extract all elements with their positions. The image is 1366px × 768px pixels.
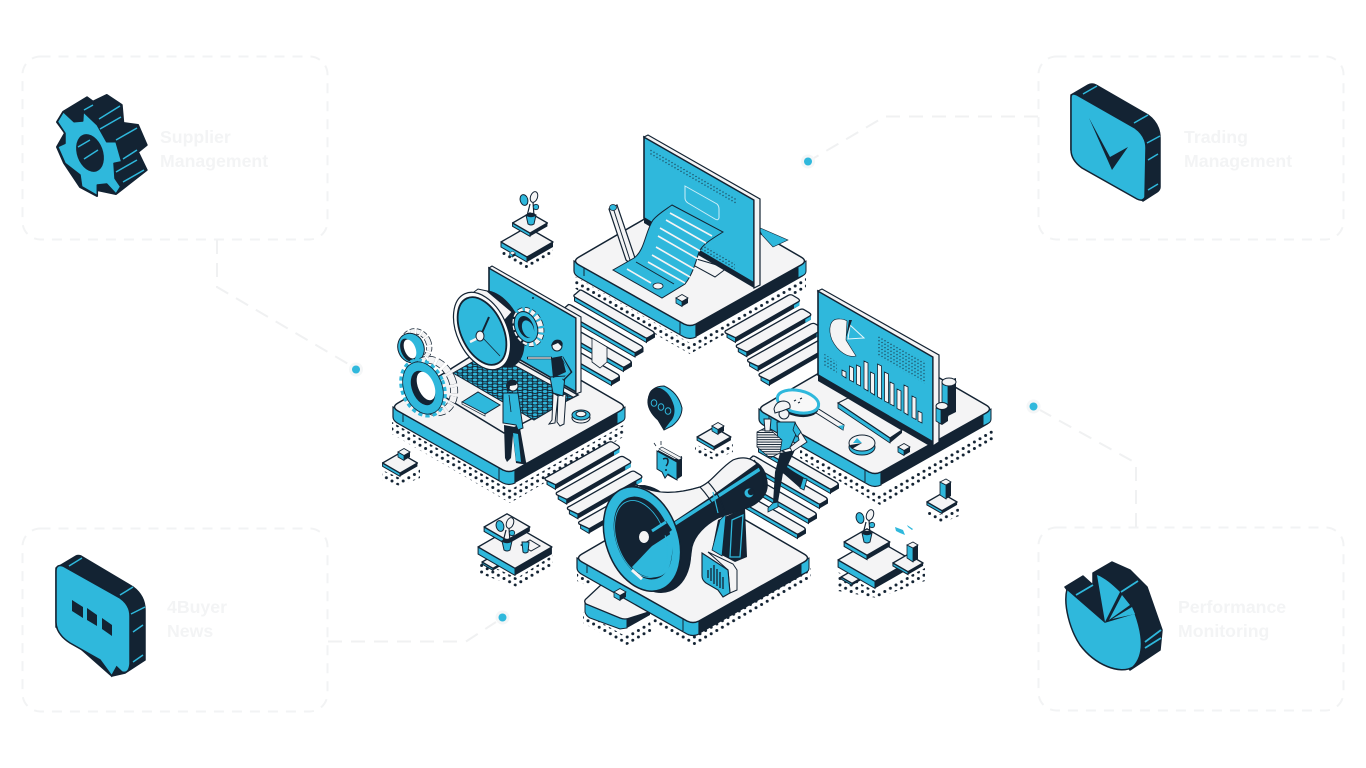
panel: trading management [1038,56,1344,240]
stair bars: bottom left [545,442,653,533]
connector: trading [801,116,1038,168]
panel: supplier management [22,56,328,240]
woman presenter [527,340,571,426]
panel: megaphone platform [577,458,809,636]
clock [442,281,536,379]
shield badge [592,338,607,368]
back sheet [758,227,788,247]
small cube [898,444,910,456]
stair bars: top left [539,290,655,386]
stair bars: bottom right [725,441,839,538]
megaphone rim back [597,475,705,603]
pencil [609,204,635,265]
label: Trading Management: Trading [1184,127,1248,147]
monitor stand [693,258,727,277]
prop: lower-right stack [838,509,923,588]
prop: device block right [927,479,957,514]
small cube [676,294,688,306]
label: 4Buyer News: 4Buyer [167,597,227,617]
connector: news [328,610,510,642]
magnifying glass [775,386,844,430]
panel: chart platform [759,289,991,486]
blue dashes [895,525,913,535]
prop: small block centre [697,422,731,450]
prop: lower-left stack [478,514,552,575]
stair bars: top right [725,295,834,385]
label: Trading Management: Management [1184,151,1292,171]
prop: small block left [383,448,417,476]
pie token [849,435,875,455]
panel: performance monitoring [1038,528,1344,710]
dots on screen [877,335,925,384]
horn body [637,458,767,590]
prop: plant block top [501,191,553,262]
panel: laptop platform [393,266,625,484]
keyboard [453,352,573,420]
dotted floor shadows [382,246,995,646]
bar chart [842,361,922,423]
cylinders [936,378,956,425]
monitor [644,135,760,288]
icon: pie chart [1065,562,1162,670]
invoice paper [613,205,723,298]
wall gear [510,307,545,347]
keyboard tray [838,398,902,443]
label: Performance Monitoring: Monitoring [1178,621,1269,641]
connector: performance [1026,400,1136,527]
small speech bubble [702,552,737,597]
man standing [503,380,528,465]
panel: invoice platform [574,135,806,338]
cube on step [614,588,626,600]
megaphone mouth [590,476,694,602]
icon: gear [57,95,147,196]
isometric scene [382,135,995,646]
gears on desk [393,327,462,421]
handle [712,508,747,562]
chart monitor [818,289,939,448]
connector: supplier [217,240,363,376]
label: Supplier Management: Management [160,151,268,171]
laptop deck [425,345,578,433]
lower step [585,583,655,629]
laptop screen [489,266,581,394]
icon: question bubble [654,441,682,480]
icon: speech bubble [56,556,145,676]
trackpad [462,392,500,416]
pie chart on screen [830,319,856,356]
label: 4Buyer News: News [167,621,213,641]
person carrying papers [757,401,807,512]
icon: check mark [1071,84,1160,201]
icon: chat pin [648,386,682,430]
panel: 4Buyer news [22,528,328,712]
label: Performance Monitoring: Performance [1178,597,1286,617]
coins [572,410,590,423]
label: Supplier Management: Supplier [160,127,231,147]
